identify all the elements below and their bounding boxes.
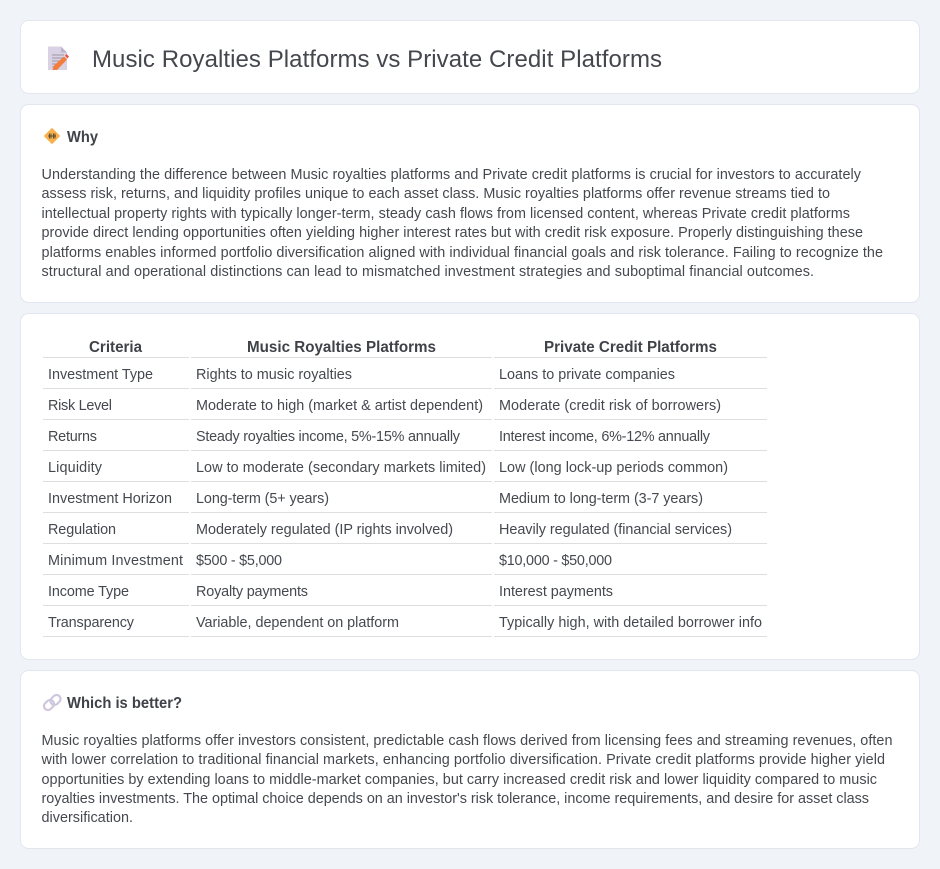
row: risk level: Moderate (credit risk of borrowers) bbox=[499, 398, 721, 414]
row: liquidity bbox=[43, 460, 767, 482]
text block: which is better paragraph: diversification. bbox=[42, 810, 133, 826]
text block: why paragraph: platforms enables informed portfolio diversification aligned with individual financial goals and risk tolerance. Failing to recognize the bbox=[42, 245, 883, 261]
row: minimum investment: Minimum Investment bbox=[48, 553, 183, 569]
panel: title header bbox=[20, 20, 920, 94]
row: income type bbox=[43, 584, 767, 606]
row: liquidity: Liquidity bbox=[48, 460, 103, 476]
row: investment horizon: Investment Horizon bbox=[48, 491, 172, 507]
row: liquidity: Low (long lock-up periods common) bbox=[499, 460, 728, 476]
panel: why bbox=[20, 104, 920, 302]
row: investment horizon: Long-term (5+ years) bbox=[196, 491, 329, 507]
row: transparency: Transparency bbox=[48, 615, 135, 631]
heading: why: Why bbox=[67, 129, 98, 146]
row: investment horizon: Medium to long-term (3-7 years) bbox=[499, 491, 703, 507]
icon: document with pencil bbox=[48, 46, 69, 70]
text block: why paragraph: Understanding the difference between Music royalties platforms and Private credit platforms is crucial for investors to accurately bbox=[42, 167, 862, 183]
text block: which is better paragraph bbox=[40, 733, 892, 826]
row: minimum investment bbox=[43, 553, 767, 574]
row: investment type: Loans to private companies bbox=[499, 367, 675, 383]
table header row: Private Credit Platforms bbox=[544, 339, 717, 356]
text block: why paragraph: assess risk, returns, and liquidity profiles unique to each asset class. Music royalties platforms offer revenue streams tied to bbox=[42, 186, 830, 202]
panel: comparison table bbox=[20, 314, 920, 660]
table header row bbox=[43, 339, 767, 358]
row: risk level: Risk Level bbox=[48, 398, 112, 414]
row: returns: Steady royalties income, 5%-15% annually bbox=[196, 429, 461, 445]
text block: why paragraph: provide direct lending opportunities often yielding higher interest rates but with credit risk exposure. Properly distinguishing these bbox=[42, 225, 863, 241]
icon: link bbox=[42, 693, 62, 712]
row: investment type: Investment Type bbox=[48, 367, 153, 383]
row: risk level bbox=[43, 398, 767, 420]
row: income type: Income Type bbox=[48, 584, 129, 600]
heading: which is better: Which is better? bbox=[67, 695, 182, 712]
table header row: Criteria bbox=[89, 339, 142, 356]
text block: which is better paragraph: with lower correlation to traditional financial markets, enhancing portfolio diversification. Private credit platforms provide higher yield bbox=[40, 752, 885, 768]
text block: why paragraph bbox=[42, 167, 883, 280]
row: returns: Returns bbox=[48, 429, 97, 445]
text block: which is better paragraph: opportunities by extending loans to middle-market companies, but carry increased credit risk and lower liquidity compared to music bbox=[42, 772, 877, 788]
row: risk level: Moderate to high (market & artist dependent) bbox=[196, 398, 483, 414]
row: income type: Interest payments bbox=[499, 584, 613, 600]
row: regulation: Regulation bbox=[48, 522, 116, 538]
text block: why paragraph: structural and operational distinctions can lead to mismatched investment strategies and suboptimal financial outcomes. bbox=[42, 264, 814, 280]
row: regulation: Moderately regulated (IP rights involved) bbox=[196, 522, 453, 538]
row: regulation: Heavily regulated (financial services) bbox=[499, 522, 732, 538]
row: liquidity: Low to moderate (secondary markets limited) bbox=[196, 460, 486, 476]
table header row: Music Royalties Platforms bbox=[247, 339, 436, 356]
row: investment type: Rights to music royalties bbox=[196, 367, 352, 383]
row: returns bbox=[43, 429, 767, 450]
row: investment type bbox=[43, 367, 767, 388]
text block: which is better paragraph: royalties investments. The optimal choice depends on an investor's risk tolerance, income requirements, and desire for asset class bbox=[42, 791, 869, 807]
row: investment horizon bbox=[43, 491, 767, 512]
row: regulation bbox=[43, 522, 767, 544]
title: Music Royalties Platforms vs Private Credit Platforms bbox=[92, 46, 662, 73]
row: transparency: Variable, dependent on platform bbox=[196, 615, 399, 631]
row: transparency bbox=[43, 615, 767, 636]
row: minimum investment: $500 - $5,000 bbox=[196, 553, 282, 569]
panel: which is better bbox=[20, 670, 920, 848]
row: income type: Royalty payments bbox=[196, 584, 308, 600]
row: transparency: Typically high, with detailed borrower info bbox=[499, 615, 762, 631]
text block: why paragraph: intellectual property rights with typically longer-term, steady cash flows from licensed content, whereas Private credit platforms bbox=[42, 206, 850, 222]
row: minimum investment: $10,000 - $50,000 bbox=[499, 553, 612, 569]
icon: orange diamond sign bbox=[44, 128, 60, 144]
row: returns: Interest income, 6%-12% annually bbox=[499, 429, 711, 445]
text block: which is better paragraph: Music royalties platforms offer investors consistent, predictable cash flows derived from licensing fees and streaming revenues, often bbox=[42, 733, 892, 749]
